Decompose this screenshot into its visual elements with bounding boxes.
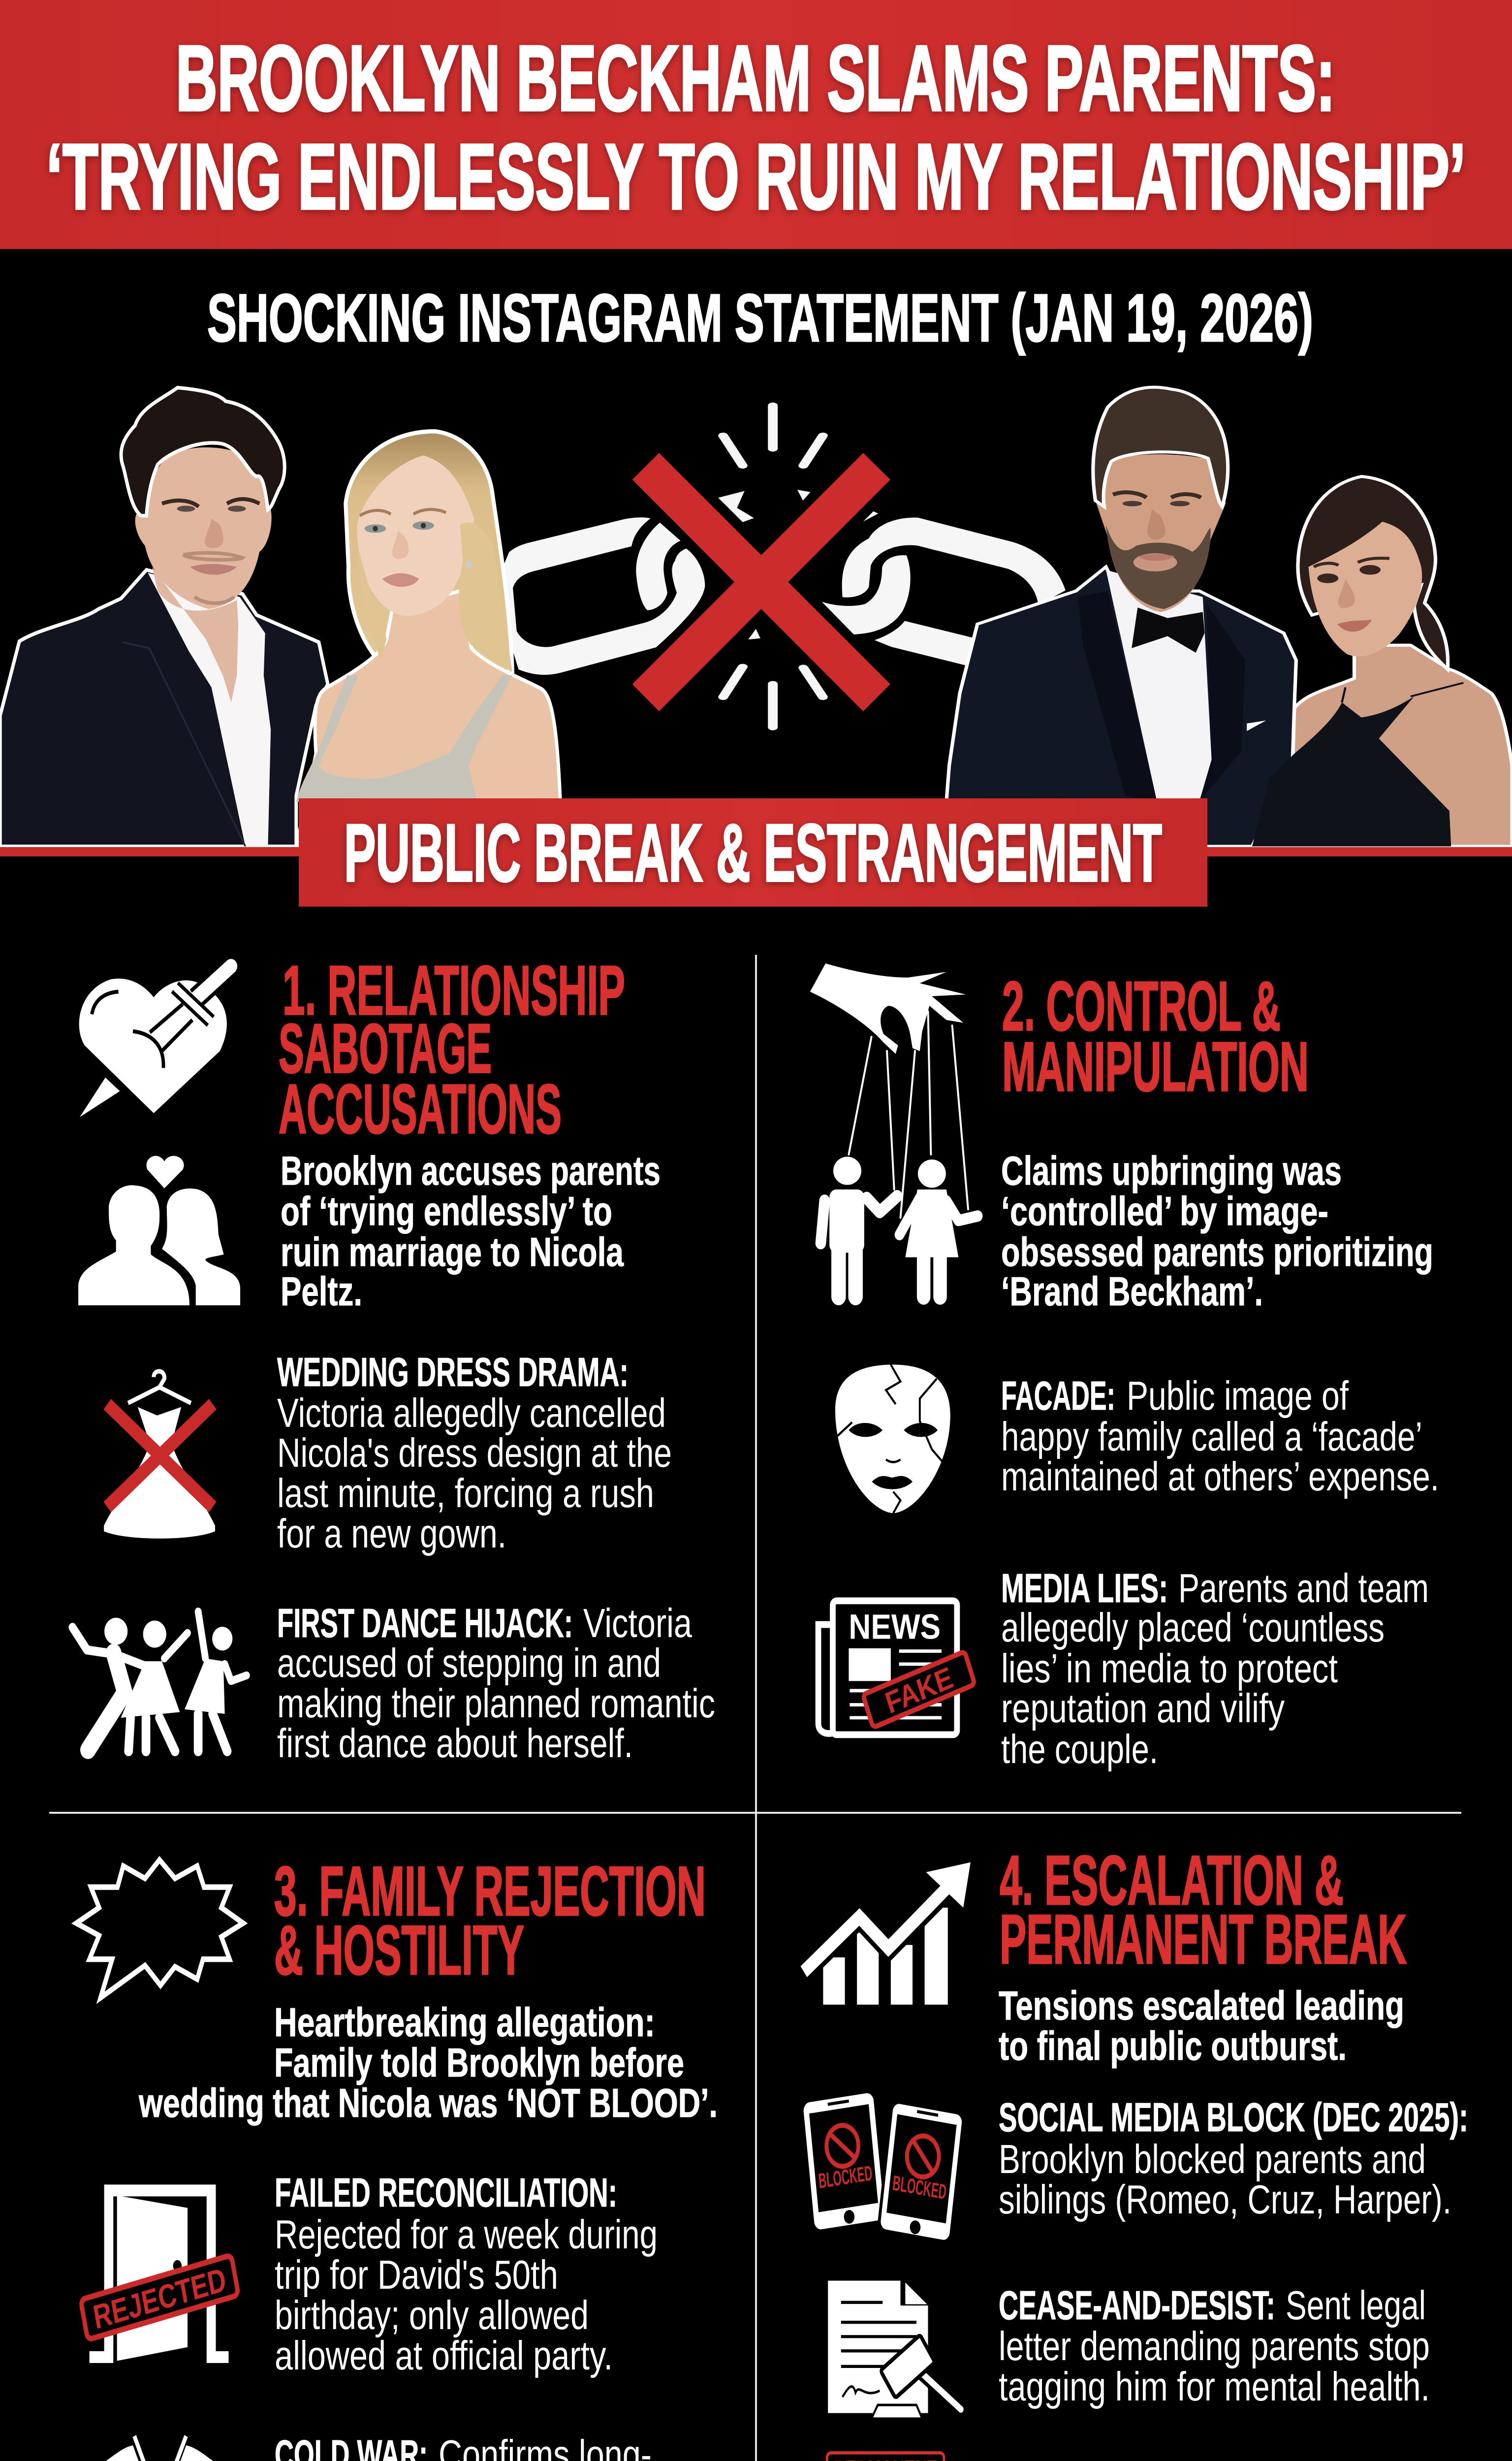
panel: 2 control and manipulation	[810, 963, 1439, 1772]
body: tensions: Tensions escalated leading	[999, 1983, 1404, 2028]
panel: 3 family rejection	[68, 1852, 718, 2461]
text: wedding dress drama: WEDDING DRESS DRAMA:	[277, 1349, 629, 1395]
heading 1: ACCUSATIONS	[279, 1070, 562, 1148]
icon: document and gavel	[828, 2281, 961, 2419]
text: facade: Public image of	[1127, 1373, 1349, 1419]
photo: David	[943, 387, 1296, 847]
text: first dance hijack: accused of stepping in and	[277, 1640, 661, 1686]
text: first dance hijack: FIRST DANCE HIJACK:	[277, 1600, 573, 1646]
body: not blood: Heartbreaking allegation:	[274, 1999, 655, 2045]
text: media lies: the couple.	[1001, 1726, 1158, 1772]
text: failed reconciliation: Rejected for a week during	[275, 2211, 658, 2257]
heading 4	[1000, 1841, 1407, 1979]
photo: Brooklyn	[0, 388, 328, 847]
icon: crossed wedding dress	[104, 1371, 215, 1539]
heading 2	[1002, 967, 1309, 1106]
text: cease and desist: Sent legal	[1286, 2282, 1426, 2328]
text: wedding dress drama: Nicola's dress design at the	[277, 1430, 672, 1476]
text: cease and desist: CEASE-AND-DESIST:	[999, 2282, 1275, 2328]
heading 1: SABOTAGE	[279, 1010, 492, 1088]
red X over chain	[632, 453, 890, 711]
icon: blocked phones: BLOCKED	[891, 2171, 947, 2205]
text: failed reconciliation: allowed at official party.	[275, 2333, 613, 2378]
text: media lies: MEDIA LIES:	[1001, 1565, 1168, 1611]
text: facade	[1001, 1373, 1439, 1499]
text: wedding dress drama: for a new gown.	[277, 1511, 506, 1556]
text: failed reconciliation: FAILED RECONCILIATION:	[275, 2170, 617, 2215]
icon: puppet master hand	[810, 963, 978, 1297]
icon: blocked phones: BLOCKED	[818, 2161, 874, 2193]
text: cold war	[275, 2431, 655, 2461]
text: wedding dress drama	[277, 1349, 672, 1556]
icon: broken bridge	[797, 2453, 973, 2461]
icon: cracked mask	[835, 1364, 950, 1513]
body: Brooklyn accuses: Brooklyn accuses parents	[281, 1148, 661, 1194]
body: Brooklyn accuses	[281, 1148, 661, 1314]
heading 3	[274, 1852, 706, 1989]
icon: rejected door: REJECTED	[91, 2261, 229, 2336]
body: Brooklyn accuses: ruin marriage to Nicola	[281, 1229, 624, 1275]
icon: rejected door	[81, 2190, 238, 2361]
text: failed reconciliation: birthday; only allowed	[275, 2292, 589, 2338]
icon: fake news paper: NEWS	[849, 1608, 941, 1646]
body: tensions: to final public outburst.	[999, 2023, 1347, 2069]
hero: broken chain	[504, 406, 1066, 727]
heading 1: 1. RELATIONSHIP	[283, 951, 625, 1030]
body: not blood: wedding that Nicola was ‘NOT BLOOD’.	[138, 2080, 718, 2126]
dividers	[49, 955, 1461, 2461]
text: social media block	[999, 2094, 1468, 2222]
icon: crossed flags	[68, 2436, 252, 2461]
text: wedding dress drama: Victoria allegedly cancelled	[277, 1390, 666, 1436]
text: failed reconciliation: trip for David's 50th	[275, 2252, 558, 2298]
text: facade: FACADE:	[1001, 1373, 1115, 1419]
heading 3: 3. FAMILY REJECTION	[274, 1852, 706, 1930]
text: first dance hijack: Victoria	[583, 1600, 693, 1646]
text: failed reconciliation	[275, 2170, 658, 2378]
section banner	[0, 798, 1512, 907]
body: upbringing: ‘controlled’ by image-	[1001, 1188, 1328, 1234]
text: media lies	[1001, 1565, 1429, 1772]
icon: speech burst	[76, 1860, 243, 1998]
text: media lies: reputation and vilify	[1001, 1685, 1285, 1731]
heading 3: & HOSTILITY	[274, 1911, 524, 1989]
heading 2: 2. CONTROL &	[1002, 967, 1281, 1045]
text: media lies: Parents and team	[1178, 1565, 1429, 1611]
body: not blood: Family told Brooklyn before	[274, 2040, 684, 2085]
body: Brooklyn accuses: of ‘trying endlessly’ to	[281, 1188, 612, 1234]
text: wedding dress drama: last minute, forcing a rush	[277, 1470, 654, 1516]
text: first dance hijack	[277, 1600, 715, 1766]
body: Brooklyn accuses: Peltz.	[281, 1268, 362, 1314]
panel: 1 relationship sabotage	[72, 951, 715, 1766]
panel: 4 escalation	[797, 1841, 1468, 2461]
icon: dancers	[72, 1611, 247, 1751]
text: first dance hijack: making their planned romantic	[277, 1680, 715, 1726]
icon: fake news paper	[819, 1601, 975, 1735]
text: media lies: lies’ in media to protect	[1001, 1645, 1338, 1691]
icon: heart and dagger	[79, 966, 231, 1117]
text: media lies: allegedly placed ‘countless	[1001, 1605, 1385, 1650]
icon: fake news paper: FAKE	[882, 1661, 957, 1721]
body: upbringing: Claims upbringing was	[1001, 1148, 1342, 1194]
title banner	[0, 0, 1512, 249]
body: not blood	[138, 1999, 718, 2126]
body: tensions	[999, 1983, 1404, 2069]
body: upbringing: ‘Brand Beckham’.	[1001, 1268, 1263, 1314]
icon: couple	[78, 1156, 240, 1305]
icon: blocked phones	[802, 2091, 964, 2243]
text: first dance hijack: first dance about herself.	[277, 1720, 633, 1766]
photo: Nicola	[296, 431, 562, 847]
heading 1	[279, 951, 625, 1148]
photo: Victoria	[1252, 476, 1512, 847]
body: upbringing	[1001, 1148, 1433, 1314]
text: cease and desist	[999, 2282, 1430, 2409]
icon: rising chart arrow	[804, 1862, 971, 2005]
